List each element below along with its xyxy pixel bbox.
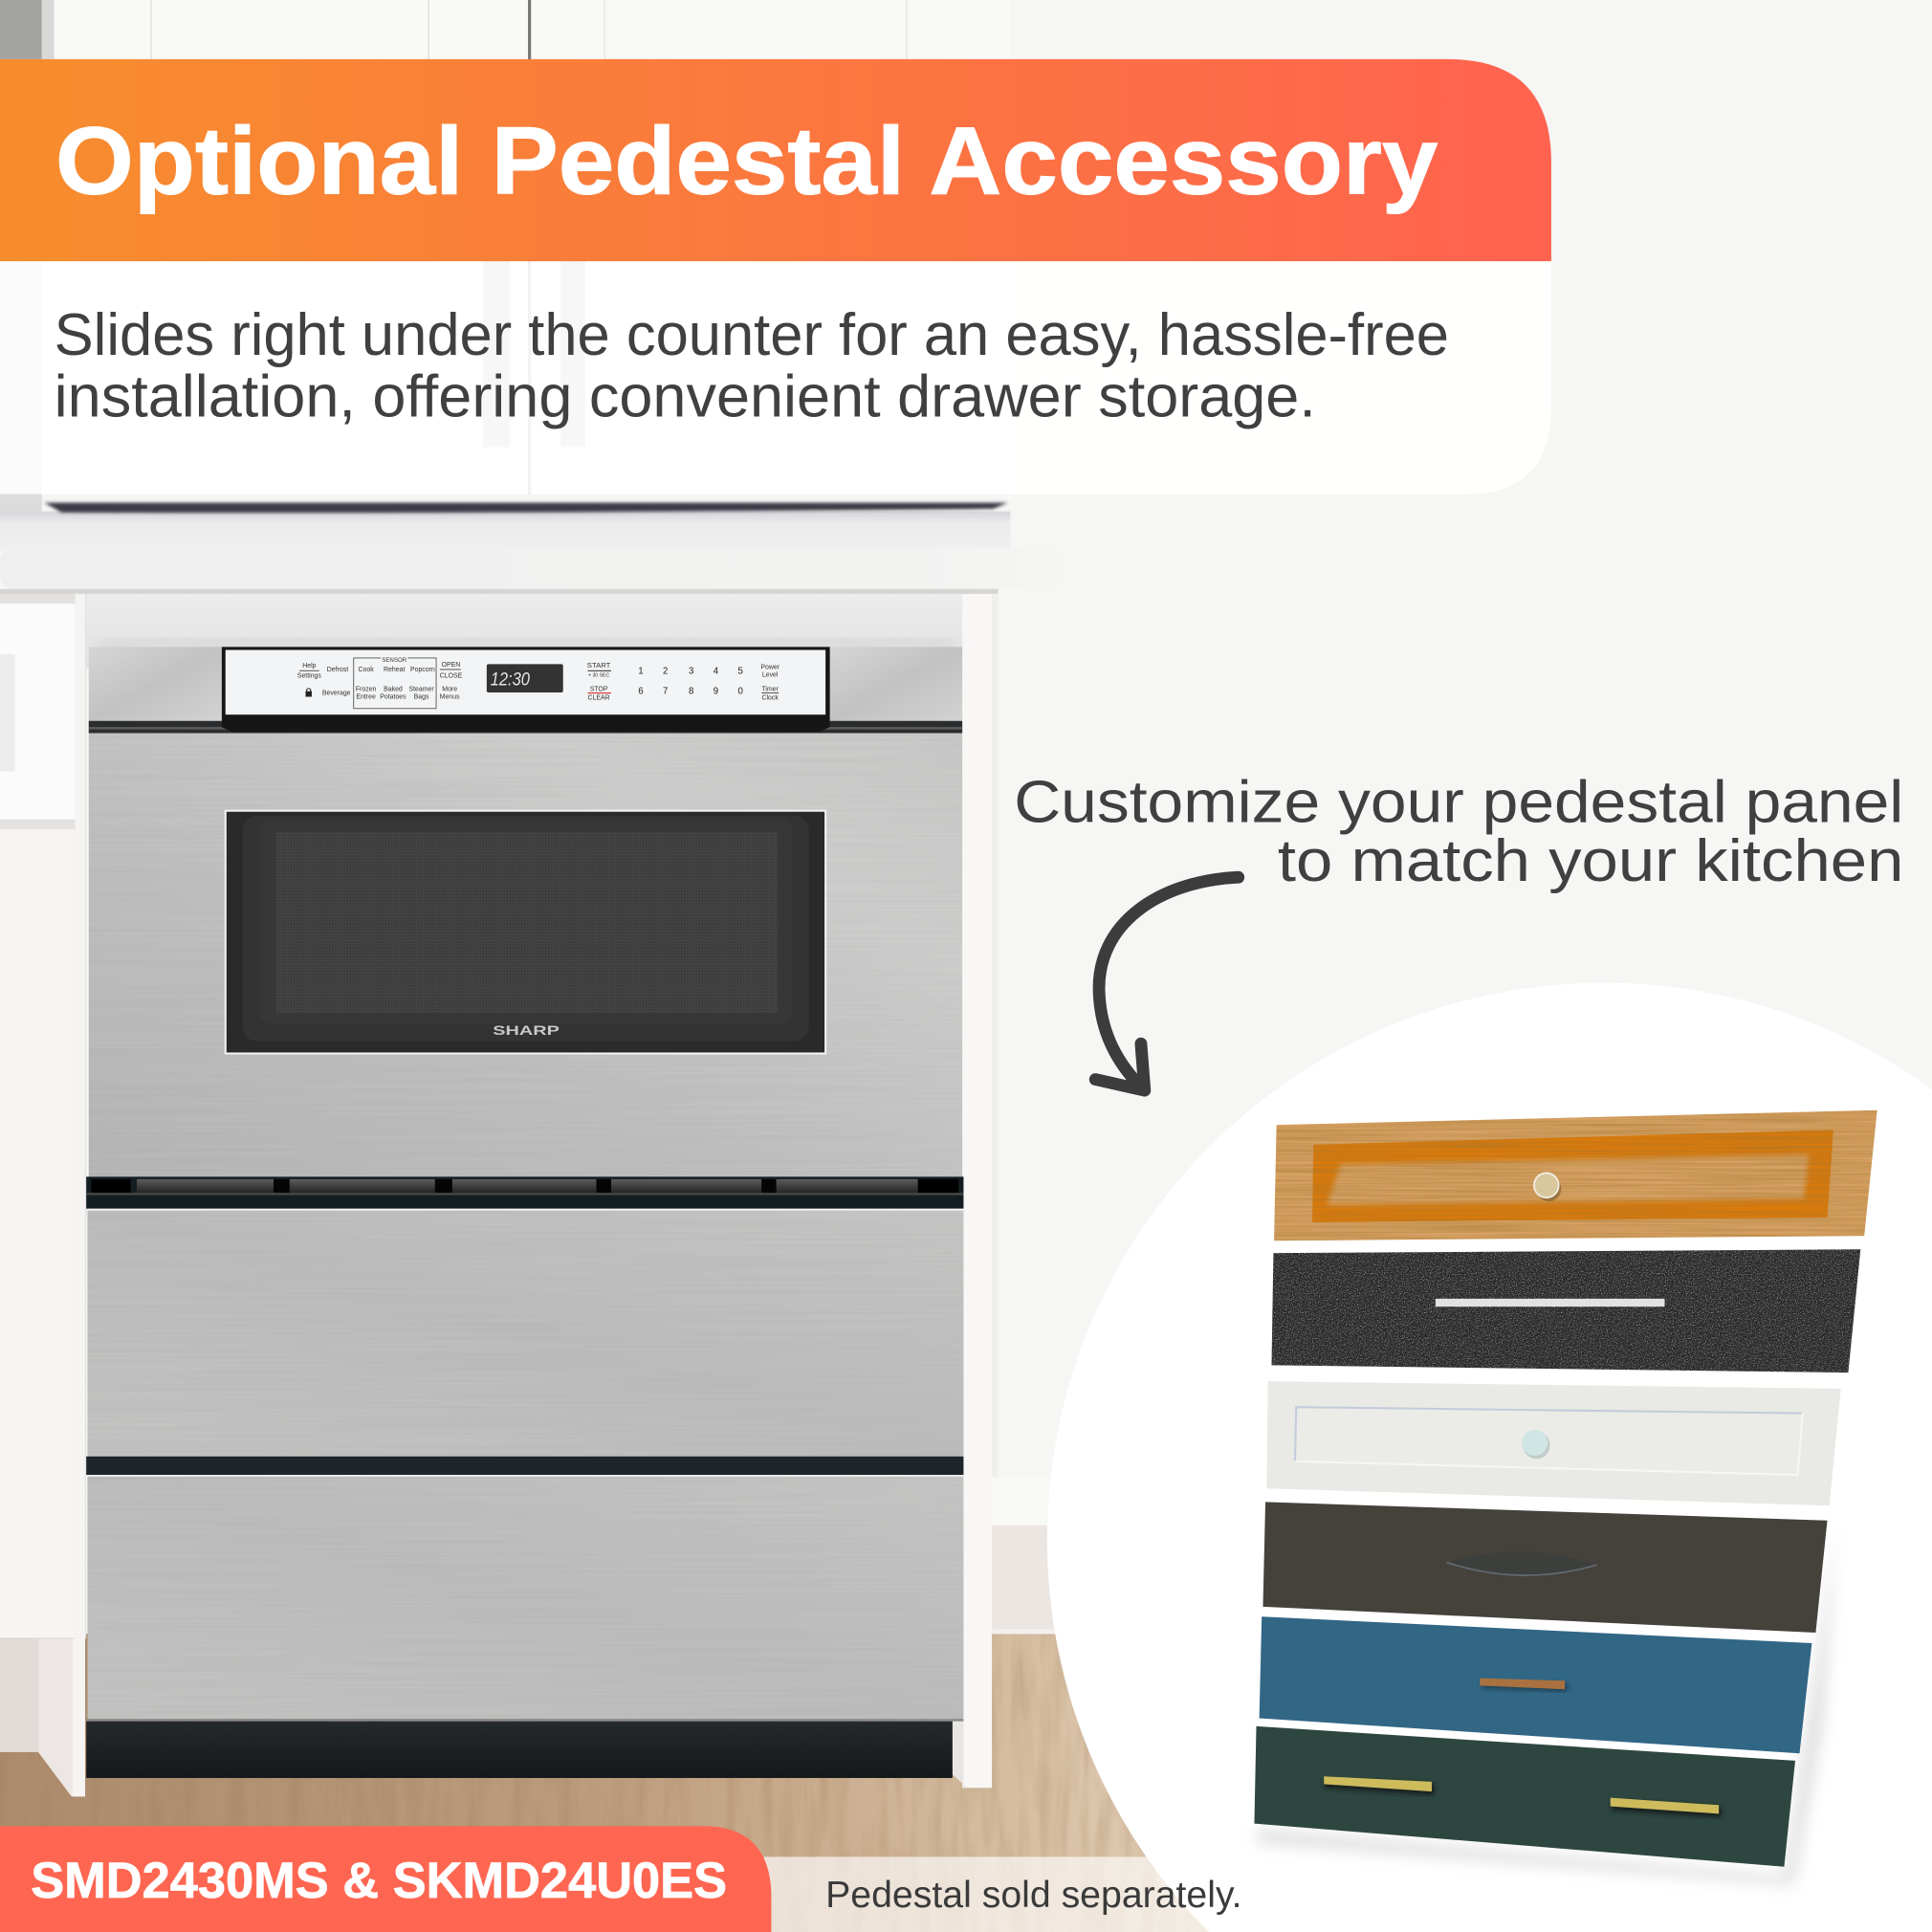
oven and pedestal [86, 638, 963, 1778]
control panel: 8 [689, 686, 693, 696]
model numbers: SMD2430MS & SKMD24U0ES [31, 1853, 727, 1909]
clock display: 12:30 [491, 670, 530, 690]
icon: lock [305, 689, 312, 697]
control panel: OPEN [442, 662, 460, 669]
disclaimer text: Pedestal sold separately. [825, 1875, 1242, 1916]
arrow [1095, 877, 1239, 1090]
cast shadow above oven [99, 638, 954, 648]
toe kick [86, 1719, 963, 1778]
right side panel [953, 594, 998, 1788]
knob [1522, 1430, 1550, 1459]
description panel [0, 261, 1551, 494]
control panel: CLOSE [440, 673, 463, 680]
description text [55, 302, 1449, 429]
control panel: Popcorn [410, 667, 435, 673]
control panel: Menus [440, 693, 460, 700]
control panel: Entree [356, 693, 376, 700]
control panel: Clock [761, 695, 779, 702]
drawer gap [86, 1457, 963, 1475]
seam strip [86, 1176, 963, 1209]
control panel: START [587, 661, 611, 670]
control panel: Potatoes [380, 693, 406, 700]
panel: charcoal [1262, 1502, 1827, 1633]
control panel: Timer [761, 687, 779, 693]
control panel: More [442, 687, 457, 693]
base cabinet face [77, 594, 998, 668]
knob [1534, 1173, 1561, 1201]
countertop [0, 494, 1080, 594]
white circle panel [1047, 983, 1932, 1932]
right handle [1611, 1798, 1722, 1817]
control panel: Help [302, 663, 317, 670]
door window [226, 811, 825, 1053]
panel: white shaker [1266, 1381, 1841, 1505]
title: Optional Pedestal Accessory [55, 107, 1438, 214]
control panel: Reheat [384, 667, 406, 673]
control panel: Baked [384, 687, 403, 693]
wall baseboard [992, 1478, 1065, 1634]
control panel: SENSOR [382, 657, 407, 664]
control panel: Frozen [356, 687, 377, 693]
control panel: Settings [297, 673, 321, 680]
panel: wood [1269, 1107, 1885, 1244]
upper cabinets [0, 0, 1010, 503]
customize callout text [1014, 769, 1903, 894]
control panel: Bags [414, 693, 429, 700]
panel: blue [1260, 1616, 1811, 1753]
recessed handle [1446, 1552, 1597, 1575]
control panel: Cook [359, 667, 374, 673]
microwave drawer door [89, 734, 962, 1176]
left cabinet doors [0, 594, 86, 1796]
control panel: 1 [638, 667, 644, 677]
description text: Slides right under the counter for an easy, hassle-free [55, 302, 1449, 368]
customizable panel options [1254, 1107, 1885, 1885]
wood floor [0, 1634, 1232, 1932]
control panel: 6 [638, 686, 644, 696]
clock display [487, 664, 563, 692]
control panel [222, 647, 830, 732]
control panel: 9 [714, 686, 718, 696]
panel shadow [1257, 1527, 1836, 1885]
left handle [1324, 1776, 1435, 1795]
customize callout text: to match your kitchen [1278, 828, 1903, 894]
brand logo: SHARP [493, 1023, 560, 1039]
control panel: 7 [663, 686, 668, 696]
sold separately strip [764, 1856, 1242, 1932]
control panel: 5 [738, 667, 743, 677]
control panel: Power [760, 665, 780, 671]
panel: black granite [1269, 1247, 1863, 1375]
bar handle [1436, 1299, 1664, 1306]
panel: green [1254, 1726, 1795, 1867]
control panel: Beverage [322, 691, 351, 697]
control panel: 3 [689, 667, 693, 677]
control panel: 2 [663, 667, 668, 677]
dark gap under control panel [89, 721, 962, 734]
pedestal drawer upper [87, 1209, 963, 1457]
control panel: 4 [714, 667, 719, 677]
customize callout text: Customize your pedestal panel [1014, 769, 1903, 835]
control panel: 0 [738, 686, 743, 696]
header banner [0, 59, 1551, 261]
control panel: STOP [590, 687, 608, 693]
model tag [0, 1826, 771, 1932]
control panel: CLEAR [588, 695, 610, 702]
description text: installation, offering convenient drawer storage. [55, 363, 1316, 429]
pedestal drawer lower [87, 1475, 963, 1719]
control panel: + 30 SEC [588, 672, 609, 678]
control panel: Steamer [408, 687, 434, 693]
handle [1480, 1679, 1568, 1692]
control panel: Level [762, 671, 779, 678]
control panel: Defrost [327, 667, 348, 673]
top trim left and right [89, 647, 962, 730]
